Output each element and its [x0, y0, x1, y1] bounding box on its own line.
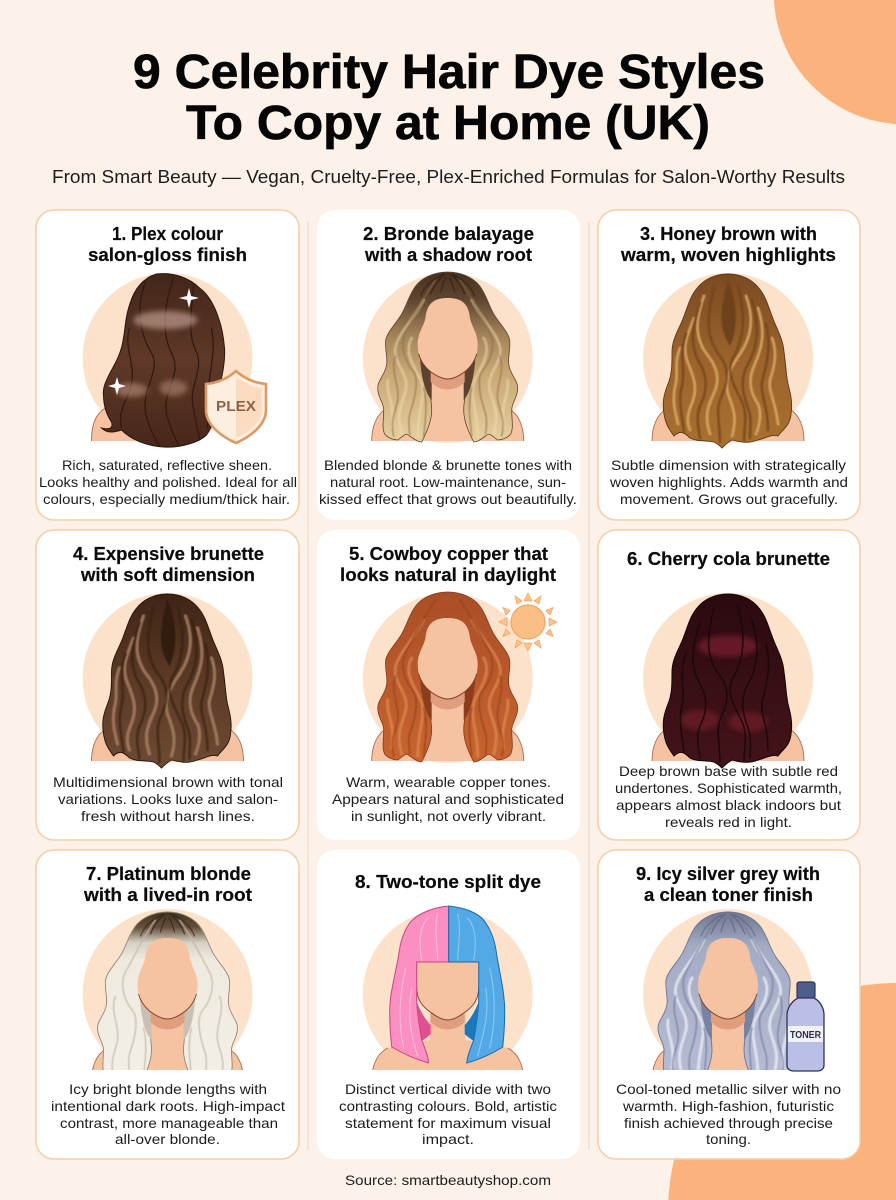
heading 1: 1. Plex colour [112, 223, 223, 244]
panel: 7 Platinum blonde [36, 850, 299, 1159]
decorative orange shape top right [774, 0, 896, 124]
heading 5: looks natural in daylight [340, 564, 556, 585]
heading 6: 6. Cherry cola brunette [627, 548, 830, 569]
heading 5: 5. Cowboy copper that [349, 543, 548, 564]
illustration: honey brown hair from behind [643, 273, 813, 448]
description 6: Deep brown base with subtle red [619, 764, 838, 779]
description 4: fresh without harsh lines. [81, 809, 255, 824]
description 9: warmth. High-fashion, futuristic [622, 1099, 834, 1114]
description 6 [615, 764, 842, 830]
description 2: kissed effect that grows out beautifully. [319, 492, 577, 507]
title [133, 46, 765, 150]
description 1 [39, 458, 297, 507]
description 6: appears almost black indoors but [616, 798, 841, 813]
heading 2: 2. Bronde balayage [363, 223, 534, 244]
description 9: finish achieved through precise [624, 1116, 833, 1131]
description 7 [51, 1082, 285, 1147]
description 4: Multidimensional brown with tonal [53, 775, 283, 790]
heading 2: with a shadow root [364, 244, 532, 265]
panel: 8 Two-tone split dye [317, 850, 580, 1159]
heading 3: warm, woven highlights [620, 244, 836, 265]
heading 1 [88, 223, 247, 265]
description 8: Distinct vertical divide with two [345, 1082, 551, 1097]
description 2: Blended blonde & brunette tones with [324, 458, 572, 473]
description 7: contrast, more manageable than [60, 1116, 278, 1131]
description 7: all-over blonde. [115, 1132, 220, 1147]
icon: toner bottle [787, 982, 824, 1071]
illustration: platinum blonde hair [82, 909, 252, 1082]
description 6: undertones. Sophisticated warmth, [615, 781, 842, 796]
heading 2 [363, 223, 534, 265]
description 8: contrasting colours. Bold, artistic [339, 1099, 557, 1114]
description 3: woven highlights. Adds warmth and [609, 475, 848, 490]
source line: Source: smartbeautyshop.com [345, 1172, 551, 1188]
heading 3 [620, 223, 836, 265]
description 3 [609, 458, 848, 507]
description 1: colours, especially medium/thick hair. [43, 492, 290, 507]
description 5: Warm, wearable copper tones. [346, 775, 551, 790]
description 4: variations. Looks luxe and salon- [58, 792, 278, 807]
heading 4: 4. Expensive brunette [73, 543, 264, 564]
subtitle: From Smart Beauty — Vegan, Cruelty-Free, Plex-Enriched Formulas for Salon-Worthy Results [52, 166, 845, 187]
illustration: icy silver hair [643, 909, 813, 1082]
icon: toner bottle: TONER [790, 1030, 822, 1041]
description 1: Looks healthy and polished. Ideal for all [39, 475, 297, 490]
decorative orange shape bottom right [668, 983, 896, 1200]
panel: 4 Expensive brunette [36, 530, 299, 840]
description 6: reveals red in light. [665, 815, 792, 830]
heading 4 [73, 543, 264, 585]
heading 9: 9. Icy silver grey with [636, 863, 820, 884]
icon: PLEX shield [206, 371, 266, 443]
panel: 9 Icy silver grey [598, 850, 860, 1159]
heading 5 [340, 543, 556, 585]
panel: 5 Cowboy copper [317, 530, 580, 840]
description 2 [319, 458, 577, 507]
description 2: natural root. Low-maintenance, sun- [330, 475, 566, 490]
description 7: intentional dark roots. High-impact [51, 1099, 285, 1114]
icon: sun [499, 593, 557, 651]
description 5 [332, 775, 564, 824]
heading 7: 7. Platinum blonde [86, 863, 251, 884]
illustration: expensive brunette hair from behind [82, 593, 252, 768]
heading 1: salon-gloss finish [88, 244, 247, 265]
heading 7 [83, 863, 252, 905]
description 8: statement for maximum visual [345, 1116, 551, 1131]
description 3: Subtle dimension with strategically [611, 458, 846, 473]
panel: 3 Honey brown [598, 210, 860, 520]
illustration: cowboy copper hair [363, 592, 533, 763]
heading 9 [636, 863, 820, 905]
description 5: in sunlight, not overly vibrant. [351, 809, 546, 824]
icon: sparkle top [179, 288, 199, 308]
description 7: Icy bright blonde lengths with [69, 1082, 267, 1097]
panel: 2 Bronde balayage [317, 210, 580, 520]
title: To Copy at Home (UK) [186, 97, 710, 150]
description 9 [616, 1082, 841, 1147]
description 9: toning. [706, 1132, 751, 1147]
illustration: cherry cola hair from behind [643, 593, 813, 768]
icon: PLEX shield: PLEX [216, 399, 256, 415]
title: 9 Celebrity Hair Dye Styles [133, 46, 765, 99]
icon: sparkle left [108, 377, 126, 395]
heading 3: 3. Honey brown with [640, 223, 817, 244]
heading 7: with a lived-in root [83, 884, 252, 905]
description 3: movement. Grows out gracefully. [620, 492, 838, 507]
description 1: Rich, saturated, reflective sheen. [62, 458, 272, 473]
description 8: impact. [422, 1132, 474, 1147]
description 8 [339, 1082, 557, 1147]
heading 8: 8. Two-tone split dye [355, 871, 541, 892]
heading 9: a clean toner finish [644, 884, 813, 905]
heading 4: with soft dimension [80, 564, 255, 585]
description 4 [53, 775, 283, 824]
illustration: bronde balayage hair [363, 272, 533, 443]
illustration: glossy brown hair from behind [82, 273, 252, 447]
panel: 1 Plex colour [36, 210, 299, 520]
panel: 6 Cherry cola [598, 530, 860, 840]
column dividers [308, 222, 589, 1150]
illustration: pink and blue split bob [363, 906, 533, 1081]
description 5: Appears natural and sophisticated [332, 792, 564, 807]
description 9: Cool-toned metallic silver with no [616, 1082, 841, 1097]
